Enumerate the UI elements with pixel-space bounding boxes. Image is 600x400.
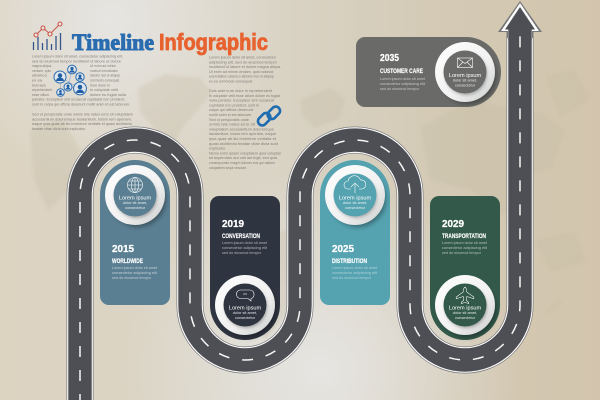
description: Lorem ipsum dolor sit amet [442, 240, 488, 245]
icon: cloud upload [344, 176, 366, 193]
text block: left column: beatae vitae dicta sunt explicabo. [32, 126, 86, 131]
badge: globe: dolor sit amet, [123, 200, 147, 205]
text block: left column: ullamco [32, 73, 47, 78]
panel: 2015 worldwide [100, 160, 170, 305]
text block: left column: magna aliqua. [32, 63, 52, 68]
text block: middle column: Ut enim ad minim veniam, quis nostrud [209, 69, 273, 74]
badge: envelope: consectetur [455, 82, 476, 88]
description: sed do eiusmod tempor [112, 275, 152, 280]
badge: envelope [435, 42, 496, 104]
text block: left column: sunt in culpa qui officia deserunt mollit anim id est laborum. [32, 102, 130, 106]
text block: middle column: laudantium, totam rem aperiam, eaque [209, 131, 276, 136]
year: 2035 [380, 53, 399, 64]
text block: middle column: mollit anim id est laborum. [209, 112, 252, 117]
text block: middle column: Lorem ipsum dolor sit amet, consectetur [209, 54, 277, 60]
text block: left column: Lorem ipsum dolor sit amet, consectetur adipiscing elit, [32, 54, 123, 58]
description: Lorem ipsum dolor sit amet [332, 265, 378, 270]
badge: airplane: Lorem ipsum [449, 306, 481, 312]
panel: 2035 customer care [356, 37, 501, 107]
text block: left column: sed do eiusmod tempor incididunt ut labore et dolore [32, 58, 121, 63]
panel: 2019 conversation [210, 196, 280, 340]
badge: airplane [435, 275, 496, 337]
text block: left column: eaque ipsa quae ab illo inventore veritatis et quasi architecto [32, 121, 132, 126]
text block: middle column: incididunt ut labore et dolore magna aliqua. [209, 64, 281, 69]
badge: globe [105, 165, 166, 227]
text block: left column: ex ea [32, 78, 43, 82]
panel: 2029 transportation [430, 196, 500, 340]
text block: left column: pariatur. Excepteur sint occaecat cupidatat non proident, [32, 97, 125, 102]
text block: left column: Sed ut perspiciatis unde omnis iste natus error sit voluptatem [32, 112, 133, 116]
badge: chat [215, 275, 276, 337]
text block: middle column: omnis iste natus error sit [209, 122, 256, 127]
text block: left column: esse cillum [32, 92, 49, 97]
icon: bar chart with trend line [34, 22, 62, 50]
icon: people network [54, 65, 86, 96]
text block: middle column: explicabo. [209, 146, 226, 151]
badge: globe: Lorem ipsum [119, 196, 151, 202]
text block: middle column [209, 54, 281, 170]
text block: middle column: culpa qui officia deserunt [209, 107, 254, 112]
icon: chain link [256, 105, 282, 127]
badge: cloud upload: dolor sit amet, [343, 200, 367, 205]
text block: middle column: Nemo enim ipsam voluptatem quia voluptas [209, 150, 281, 155]
badge: chat: dolor sit amet, [233, 310, 257, 315]
text block: left column: in voluptate velit [90, 87, 119, 92]
text block: middle column: in voluptate velit esse cillum dolore eu fugiat [209, 93, 281, 98]
badge: cloud upload: consectetur [345, 205, 366, 210]
heading: CONVERSATION [222, 234, 260, 240]
badge: cloud upload [325, 165, 386, 227]
year: 2029 [442, 219, 464, 230]
text block: left column: Duis aute [32, 82, 46, 87]
heading: CUSTOMER CARE [380, 69, 423, 75]
description: consectetur adipiscing elit [442, 245, 488, 250]
text block: middle column: adipiscing elit, sed do eiusmod tempor [209, 59, 278, 64]
text block: middle column: Sed ut perspiciatis unde [209, 117, 249, 122]
text block: middle column: sit aspernatur aut odit aut fugit, sed quia [209, 155, 278, 160]
description [442, 240, 488, 255]
world map [30, 70, 590, 340]
text block: middle column: quasi architecto beatae vitae dicta sunt [209, 141, 279, 146]
text block: left column: veniam, quis [32, 68, 51, 73]
heading: TRANSPORTATION [442, 234, 486, 240]
badge: cloud upload: Lorem ipsum [339, 196, 371, 202]
badge: envelope: dolor sit amet, [453, 78, 477, 82]
badge: airplane: dolor sit amet, [453, 310, 477, 315]
text block: left column: Ut enim ad minim [90, 63, 116, 68]
year: 2025 [332, 244, 354, 255]
text block: left column: dolore eu fugiat nulla [90, 92, 127, 97]
lane dashes [80, 26, 520, 400]
text block: middle column: voluptatem sequi nesciunt. [209, 165, 247, 170]
description: consectetur adipiscing elit [332, 270, 378, 275]
heading: DISTRIBUTION [332, 259, 367, 265]
icon: speech bubble [236, 290, 254, 301]
description: consectetur adipiscing elit [380, 81, 426, 86]
year: 2015 [112, 244, 134, 255]
description: Lorem ipsum dolor sit amet [222, 240, 268, 245]
description: consectetur adipiscing elit [112, 270, 158, 275]
arrow head [498, 1, 542, 40]
road [80, 1, 542, 400]
description: consectetur adipiscing elit [222, 245, 268, 250]
description: sed do eiusmod tempor [380, 86, 420, 91]
description: sed do eiusmod tempor [332, 275, 372, 280]
text block: middle column: ipsa quae ab illo inventore veritatis et [209, 136, 277, 141]
description: sed do eiusmod tempor [222, 250, 262, 255]
badge: chat: consectetur [235, 315, 256, 320]
description [222, 240, 268, 255]
panel: 2025 distribution [320, 160, 390, 305]
year: 2019 [222, 219, 244, 230]
description [112, 265, 158, 280]
text block: left column: reprehenderit [32, 87, 53, 92]
icon: globe [128, 178, 142, 192]
text block: middle column: nulla pariatur. Excepteur sint occaecat [209, 98, 275, 103]
heading: Timeline: Timeline [72, 30, 154, 55]
badge: globe: consectetur [125, 205, 146, 210]
text block: middle column: Duis aute irure dolor in reprehenderit [209, 88, 273, 93]
description: Lorem ipsum dolor sit amet [380, 76, 426, 81]
text block: middle column: consequuntur magni dolores eos qui ratione [209, 160, 275, 165]
description: Lorem ipsum dolor sit amet [112, 265, 158, 270]
icon: airplane [456, 287, 474, 304]
heading: WORLDWIDE [112, 259, 143, 265]
text block: middle column: cupidatat non proident, sunt in [209, 102, 259, 107]
badge: envelope: Lorem ipsum [449, 73, 481, 79]
description: sed do eiusmod tempor [442, 250, 482, 255]
text block: left column: irure dolor in [90, 82, 110, 87]
badge: chat: Lorem ipsum [229, 306, 261, 312]
title [34, 22, 268, 55]
text block: left column: laboris nisi ut aliquip [90, 73, 120, 78]
text block: middle column: exercitation ullamco laboris nisi ut aliquip [209, 74, 274, 79]
text block: left column: accusantium doloremque laudantium, totam rem aperiam, [32, 116, 132, 121]
icon: envelope [458, 58, 472, 68]
description [332, 265, 378, 280]
text block: middle column: ex ea commodo consequat. [209, 78, 253, 84]
description [380, 76, 426, 91]
text block: middle column: voluptatem accusantium doloremque [209, 126, 274, 131]
text block: left column [32, 54, 133, 131]
text block: left column: nostrud exercitation [90, 68, 118, 73]
text block: left column: commodo consequat. [90, 78, 120, 82]
badge: airplane: consectetur [455, 315, 476, 320]
heading: Infographic: Infographic [159, 29, 268, 55]
